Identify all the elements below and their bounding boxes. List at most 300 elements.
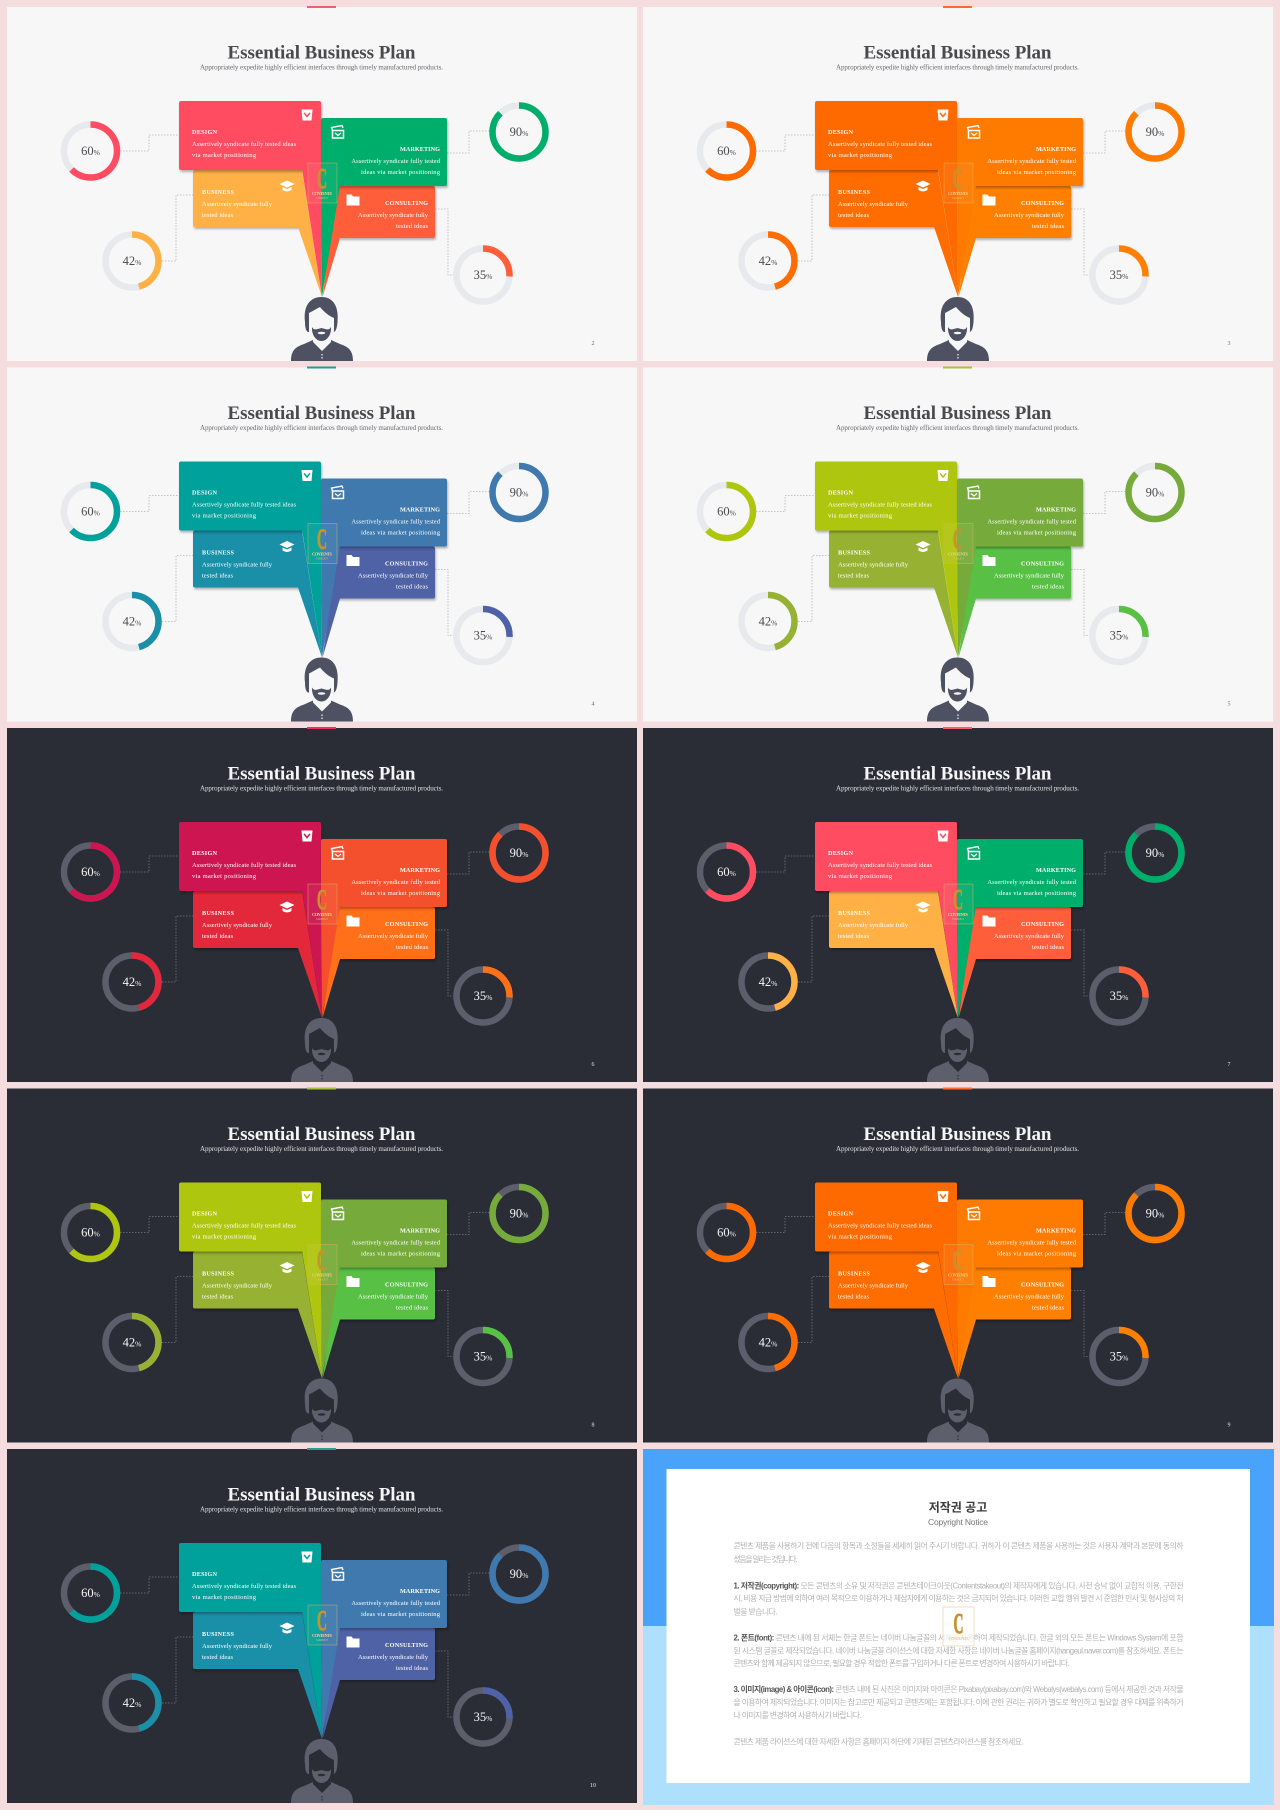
page number: 5 — [1228, 702, 1230, 708]
marketing text: ideas via market positioning — [361, 1611, 441, 1618]
watermark logo — [944, 524, 973, 564]
ring 60% — [64, 485, 117, 538]
business text: Assertively syndicate fully — [202, 201, 273, 208]
title: Essential Business Plan — [228, 1124, 416, 1145]
ring 90% — [1128, 466, 1182, 519]
consulting text — [358, 200, 429, 230]
ring 35% — [456, 609, 510, 662]
marketing bubble — [321, 839, 447, 1018]
light blue lower background — [643, 1626, 1274, 1805]
ring 90% — [492, 106, 546, 158]
watermark logo: TAKEOUT — [952, 558, 964, 560]
icon: consulting — [982, 555, 996, 566]
watermark logo — [308, 884, 337, 924]
top accent tab — [307, 6, 336, 8]
ring 42% — [106, 1316, 158, 1369]
icon: business — [280, 1622, 294, 1634]
ring 35% — [1092, 609, 1146, 662]
ring 42%: 42% — [759, 1336, 777, 1350]
slide 6: dark crimson orange — [7, 727, 637, 1082]
intro paragraph: 콘텐츠 제품을 사용하기 전에 다음의 항목과 소정들을 세세히 읽어 주시기 바랍니다. 귀하가 이 콘텐츠 제품을 사용하는 것은 사용자 계약과 본문에 동의하 — [734, 1540, 1184, 1550]
design bubble — [179, 822, 322, 1018]
ring 90% — [492, 1548, 546, 1600]
design bubble — [815, 1182, 958, 1378]
business bubble — [193, 1612, 322, 1739]
consulting text: Assertively syndicate fully — [994, 572, 1065, 580]
marketing bubble — [321, 1560, 447, 1739]
marketing bubble — [957, 118, 1083, 297]
ring 42%: 42% — [123, 614, 141, 628]
title: Essential Business Plan — [228, 1484, 416, 1506]
marketing text: ideas via market positioning — [361, 1250, 441, 1258]
business text — [202, 189, 273, 219]
ring 42%: 42% — [123, 254, 141, 268]
icon: business — [916, 902, 930, 912]
ring 60% — [700, 485, 753, 538]
ring 42%: 42% — [123, 1336, 141, 1350]
page number: 7 — [1228, 1062, 1230, 1068]
consulting text: CONSULTING — [1021, 200, 1064, 207]
design text — [828, 1210, 932, 1240]
icon: consulting — [346, 1636, 360, 1648]
watermark logo: TAKEOUT — [952, 1278, 964, 1282]
subtitle: Appropriately expedite highly efficient interfaces through timely manufactured products. — [200, 784, 443, 792]
ring 35% — [456, 1690, 510, 1744]
marketing text: ideas via market positioning — [997, 1250, 1077, 1258]
consulting text: CONSULTING — [1021, 560, 1064, 568]
marketing text: MARKETING — [400, 506, 440, 514]
watermark logo: TAKEOUT — [316, 918, 328, 921]
page number: 10 — [590, 1783, 596, 1789]
marketing text — [351, 1228, 441, 1258]
consulting text: CONSULTING — [1021, 921, 1064, 928]
watermark logo — [944, 163, 973, 203]
watermark logo: TAKEOUT — [316, 197, 328, 200]
marketing bubble — [321, 118, 447, 297]
icon: consulting — [982, 194, 996, 206]
ring 90%: 90% — [510, 1567, 528, 1581]
design bubble — [179, 1543, 322, 1739]
design text: Assertively syndicate fully tested ideas — [192, 862, 296, 869]
watermark logo — [944, 884, 973, 924]
design text: via market positioning — [192, 512, 257, 520]
subtitle: Appropriately expedite highly efficient interfaces through timely manufactured products. — [836, 1145, 1079, 1153]
consulting text: Assertively syndicate fully — [358, 1294, 429, 1300]
business bubble — [193, 530, 322, 658]
business text: Assertively syndicate fully — [202, 922, 273, 929]
marketing text — [351, 1588, 441, 1618]
consulting bubble — [322, 907, 435, 1018]
business bubble — [193, 1252, 322, 1378]
title: Essential Business Plan — [864, 403, 1052, 424]
marketing text: Assertively syndicate fully tested — [351, 879, 441, 886]
business text: BUSINESS — [838, 910, 871, 917]
title: Essential Business Plan — [864, 42, 1052, 64]
marketing text: ideas via market positioning — [997, 530, 1077, 536]
icon: marketing — [968, 126, 980, 138]
design text: DESIGN — [192, 129, 218, 136]
ring 42% — [106, 234, 158, 288]
business text: Assertively syndicate fully — [838, 1282, 909, 1290]
section 3: image and icon — [734, 1684, 1184, 1720]
watermark logo: CONTENTS — [312, 1272, 333, 1278]
ring 35% — [1092, 248, 1146, 302]
icon: marketing — [332, 126, 344, 138]
icon: marketing — [968, 486, 980, 498]
icon: design — [302, 1191, 312, 1202]
slide 2: light coral green — [7, 6, 637, 361]
icon: consulting — [346, 1276, 360, 1287]
person icon — [291, 658, 353, 722]
icon: marketing — [332, 1207, 344, 1220]
icon: design — [938, 470, 948, 481]
slide background — [7, 368, 637, 722]
top accent tab — [943, 6, 972, 8]
marketing text: MARKETING — [1036, 1228, 1076, 1234]
design text: via market positioning — [828, 152, 893, 159]
icon: marketing — [968, 846, 980, 859]
design text — [828, 490, 932, 520]
consulting text: CONSULTING — [385, 1282, 428, 1288]
slide background — [643, 1088, 1273, 1442]
watermark logo: C — [317, 884, 327, 916]
design text — [192, 1210, 296, 1240]
watermark logo: CONTENTS — [312, 912, 333, 917]
watermark logo: TAKEOUT — [952, 918, 964, 921]
watermark logo: C — [954, 1608, 964, 1640]
icon: design — [302, 830, 312, 842]
top accent tab — [307, 727, 336, 729]
ring 90%: 90% — [1146, 125, 1164, 139]
marketing text: MARKETING — [1036, 867, 1076, 874]
consulting text: CONSULTING — [1021, 1282, 1064, 1288]
connectors — [120, 492, 489, 636]
connectors — [756, 852, 1125, 996]
design text: Assertively syndicate fully tested ideas — [192, 502, 296, 508]
marketing text: MARKETING — [400, 1228, 440, 1234]
consulting text: tested ideas — [1032, 223, 1064, 230]
ring 90%: 90% — [510, 486, 528, 500]
slide 8: dark lime green — [7, 1088, 637, 1442]
person icon — [927, 658, 989, 722]
icon: design — [938, 830, 948, 842]
connectors — [120, 1573, 489, 1717]
design text — [192, 490, 296, 520]
marketing text: MARKETING — [400, 146, 440, 153]
ring 35% — [456, 248, 510, 302]
design text: DESIGN — [828, 850, 854, 857]
design text: via market positioning — [192, 152, 257, 159]
design text: Assertively syndicate fully tested ideas — [828, 1222, 932, 1230]
ring 35%: 35% — [474, 1710, 492, 1724]
marketing text: ideas via market positioning — [997, 890, 1077, 897]
title: Essential Business Plan — [228, 403, 416, 424]
ring 35%: 35% — [474, 268, 492, 282]
business text: Assertively syndicate fully — [202, 1282, 273, 1290]
business text: BUSINESS — [202, 550, 235, 556]
blue upper background — [643, 1449, 1274, 1626]
business text: tested ideas — [202, 1294, 233, 1300]
icon: business — [280, 1262, 294, 1273]
watermark logo — [944, 1244, 973, 1284]
page number: 6 — [592, 1062, 594, 1068]
business text: Assertively syndicate fully — [202, 1643, 273, 1650]
marketing text: Assertively syndicate fully tested — [987, 518, 1077, 526]
title: Essential Business Plan — [864, 1124, 1052, 1145]
watermark logo: C — [317, 1244, 327, 1276]
section 3: image and icon: 을 이용하여 제작되었습니다. 이미지는 참고로만 제공되고 콘텐츠에는 포함됩니다. 이에 관한 권리는 귀하가 별도로 확인하고 필요할 경우 대체를 위촉하거 — [734, 1697, 1184, 1707]
icon: business — [916, 541, 930, 552]
business text: tested ideas — [838, 572, 869, 580]
marketing text: Assertively syndicate fully tested — [351, 1600, 441, 1607]
business text: tested ideas — [202, 572, 233, 580]
design text — [828, 129, 932, 159]
watermark logo: TAKEOUT — [316, 1639, 328, 1642]
icon: design — [938, 110, 948, 120]
ring 90%: 90% — [510, 846, 528, 860]
closing line: 콘텐츠 제품 라이선스에 대한 자세한 사항은 홈페이지 하단에 기재된 콘텐츠라이선스를 참조하세요. — [734, 1736, 1024, 1746]
watermark logo: CONTENTS — [312, 1633, 333, 1638]
ring 90%: 90% — [510, 1206, 528, 1220]
marketing text — [987, 867, 1077, 897]
business text — [838, 550, 909, 580]
marketing bubble — [957, 478, 1083, 658]
person icon — [291, 1378, 353, 1442]
design bubble — [179, 462, 322, 658]
ring 90% — [492, 466, 546, 519]
consulting text: tested ideas — [1032, 584, 1064, 590]
consulting text: tested ideas — [396, 1665, 428, 1672]
consulting text — [994, 200, 1065, 230]
consulting text: CONSULTING — [385, 1642, 428, 1649]
consulting bubble — [322, 1628, 435, 1739]
marketing text: Assertively syndicate fully tested — [351, 1240, 441, 1246]
consulting text: Assertively syndicate fully — [358, 933, 429, 940]
marketing text: MARKETING — [400, 1588, 440, 1595]
business text: Assertively syndicate fully — [202, 562, 273, 568]
icon: consulting — [982, 916, 996, 926]
subtitle: Appropriately expedite highly efficient interfaces through timely manufactured products. — [200, 1506, 443, 1514]
person icon — [927, 1378, 989, 1442]
marketing text: MARKETING — [1036, 506, 1076, 514]
business text — [202, 550, 273, 580]
marketing text: ideas via market positioning — [361, 169, 441, 176]
design text: via market positioning — [828, 873, 893, 880]
business text: tested ideas — [838, 933, 869, 940]
design text: Assertively syndicate fully tested ideas — [828, 862, 932, 869]
ring 42%: 42% — [759, 254, 777, 268]
marketing text — [351, 146, 441, 176]
page number: 2 — [592, 341, 594, 347]
consulting text: CONSULTING — [385, 560, 428, 568]
connectors — [756, 492, 1125, 636]
consulting text: Assertively syndicate fully — [358, 572, 429, 580]
slide background — [7, 1449, 637, 1803]
watermark logo: C — [317, 524, 327, 556]
page number: 4 — [592, 702, 594, 708]
person icon — [291, 1739, 353, 1803]
consulting bubble — [958, 907, 1071, 1018]
design text: DESIGN — [828, 1210, 854, 1218]
design text: Assertively syndicate fully tested ideas — [192, 1583, 296, 1590]
watermark logo: C — [317, 1605, 327, 1637]
intro paragraph: 셨음을 알리는 것입니다. — [734, 1554, 798, 1564]
ring 60%: 60% — [717, 504, 736, 518]
title: Essential Business Plan — [228, 764, 416, 784]
design text — [192, 850, 296, 880]
top accent tab — [943, 727, 972, 729]
design text: DESIGN — [828, 129, 854, 136]
ring 60% — [64, 1206, 117, 1259]
watermark logo: CONTENTS — [312, 552, 333, 556]
ring 35%: 35% — [1110, 268, 1128, 282]
ring 42% — [106, 595, 158, 648]
consulting text: CONSULTING — [385, 921, 428, 928]
business text: tested ideas — [838, 1294, 869, 1300]
section 1: copyright: 벌을 받습니다. — [734, 1606, 778, 1616]
business bubble — [829, 170, 958, 297]
title: Essential Business Plan — [864, 764, 1052, 784]
top accent tab — [943, 1088, 972, 1090]
ring 42% — [742, 234, 794, 288]
watermark logo — [308, 163, 337, 203]
ring 35% — [1092, 970, 1146, 1022]
ring 42%: 42% — [759, 975, 777, 989]
ring 60%: 60% — [81, 504, 100, 518]
watermark logo — [943, 1607, 974, 1646]
business text: BUSINESS — [202, 1270, 235, 1278]
ring 35%: 35% — [474, 989, 492, 1003]
ring 60%: 60% — [81, 865, 100, 879]
ring 42%: 42% — [123, 975, 141, 989]
person icon — [927, 1018, 989, 1082]
design text — [192, 129, 296, 159]
marketing text: Assertively syndicate fully tested — [987, 879, 1077, 886]
marketing bubble — [957, 839, 1083, 1018]
business text: BUSINESS — [838, 189, 871, 196]
design bubble — [815, 462, 958, 658]
ring 60%: 60% — [81, 144, 100, 158]
icon: marketing — [332, 1568, 344, 1580]
design text: Assertively syndicate fully tested ideas — [192, 141, 296, 148]
ring 35%: 35% — [1110, 628, 1128, 642]
watermark logo: CONTENTS — [948, 912, 969, 917]
business bubble — [193, 170, 322, 297]
design text: DESIGN — [192, 1571, 218, 1578]
design bubble — [815, 822, 958, 1018]
consulting text: Assertively syndicate fully — [994, 212, 1065, 219]
notice subheading: Copyright Notice — [928, 1517, 988, 1527]
slide 5: light lime green — [643, 366, 1273, 722]
watermark logo: C — [317, 163, 327, 195]
consulting text: Assertively syndicate fully — [994, 933, 1065, 940]
ring 90%: 90% — [1146, 486, 1164, 500]
ring 35%: 35% — [474, 1350, 492, 1364]
page number: 8 — [592, 1422, 594, 1428]
slide background — [7, 7, 637, 361]
design text: via market positioning — [192, 873, 257, 880]
consulting text — [994, 560, 1065, 590]
slide 7: dark coral green — [643, 727, 1273, 1082]
subtitle: Appropriately expedite highly efficient interfaces through timely manufactured products. — [200, 64, 443, 72]
ring 60%: 60% — [81, 1586, 100, 1600]
ring 90% — [492, 1187, 546, 1240]
consulting text: Assertively syndicate fully — [358, 1654, 429, 1661]
design bubble — [179, 1182, 322, 1378]
ring 35%: 35% — [474, 628, 492, 642]
slide background — [7, 728, 637, 1082]
ring 60%: 60% — [717, 144, 736, 158]
connectors — [120, 1212, 489, 1356]
person icon — [291, 297, 353, 361]
ring 90%: 90% — [510, 125, 528, 139]
icon: business — [916, 1262, 930, 1273]
icon: design — [302, 110, 312, 120]
icon: design — [302, 1552, 312, 1562]
ring 60% — [64, 846, 117, 898]
ring 35% — [456, 1330, 510, 1383]
marketing text — [351, 867, 441, 897]
design text: Assertively syndicate fully tested ideas — [828, 502, 932, 508]
ring 42%: 42% — [123, 1696, 141, 1710]
watermark logo: CONTENTS — [948, 552, 969, 556]
subtitle: Appropriately expedite highly efficient interfaces through timely manufactured products. — [200, 1145, 443, 1153]
ring 42% — [742, 595, 794, 648]
section 1: copyright: 시, 비용 지급 방법에 의하여 여러 목적으로 이용하거나 제삼자에게 이용하는 것은 금지되어 있습니다. 이러한 교합 행위 발견 시 준엄한 민사 및 형사상의 처 — [734, 1593, 1184, 1603]
section 1: copyright: 1. 저작권(copyright): 모든 콘텐츠의 소유 및 저작권은 콘텐츠테이크아웃(Contentstakeout)의 제작자에게 있습니다. 사전 승낙 없이 교합적 이용, 구한전 — [734, 1580, 1184, 1590]
marketing bubble — [321, 478, 447, 658]
section 3: image and icon: 3. 이미지(image) & 아이콘(icon): 콘텐츠 내에 된 사진은 이미지와 아이콘은 Pixabay(pixabay.com)와 Webalys(webalys.com) 등에서 제공한 것과 저작물 — [734, 1684, 1184, 1694]
ring 42% — [742, 956, 794, 1008]
business text — [838, 1270, 909, 1300]
business text — [838, 189, 909, 219]
design text: DESIGN — [192, 490, 218, 496]
icon: business — [280, 541, 294, 552]
intro paragraph — [734, 1540, 1184, 1564]
consulting bubble — [322, 186, 435, 297]
consulting text: tested ideas — [396, 584, 428, 590]
marketing text — [987, 506, 1077, 536]
icon: consulting — [982, 1276, 996, 1287]
consulting text: Assertively syndicate fully — [358, 212, 429, 219]
marketing text: ideas via market positioning — [997, 169, 1077, 176]
watermark logo: CONTENTS — [948, 1636, 969, 1641]
section 2: font: 콘텐츠와 함께 제공되지 않으므로, 필요할 경우 적합한 폰트를 구입하거나 다른 폰트로 변경하여 사용하시기 바랍니다. — [734, 1658, 1070, 1668]
ring 90%: 90% — [1146, 846, 1164, 860]
icon: business — [280, 902, 294, 912]
business text: Assertively syndicate fully — [838, 562, 909, 568]
watermark logo: C — [953, 1244, 963, 1276]
business text: BUSINESS — [202, 189, 235, 196]
design text: Assertively syndicate fully tested ideas — [192, 1222, 296, 1230]
business bubble — [829, 891, 958, 1018]
design text: Assertively syndicate fully tested ideas — [828, 141, 932, 148]
ring 60%: 60% — [81, 1226, 100, 1240]
slide background — [643, 7, 1273, 361]
consulting text — [994, 1282, 1065, 1312]
section 2: font: 된 시스템 글꼴로 제작되었습니다. 네이버 나눔글꼴 라이선스에 대한 자세한 사항은 네이버 나눔글꼴 홈페이지(hangeul.naver.com)를 참조하세요. 폰트는 — [734, 1646, 1184, 1656]
consulting bubble — [322, 1268, 435, 1378]
consulting bubble — [322, 546, 435, 658]
section 1: copyright — [734, 1580, 1184, 1616]
ring 60%: 60% — [717, 865, 736, 879]
consulting bubble — [958, 186, 1071, 297]
watermark logo: TAKEOUT — [316, 1278, 328, 1282]
business text: BUSINESS — [202, 910, 235, 917]
consulting bubble — [958, 546, 1071, 658]
business text: BUSINESS — [838, 550, 871, 556]
ring 60%: 60% — [717, 1226, 736, 1240]
